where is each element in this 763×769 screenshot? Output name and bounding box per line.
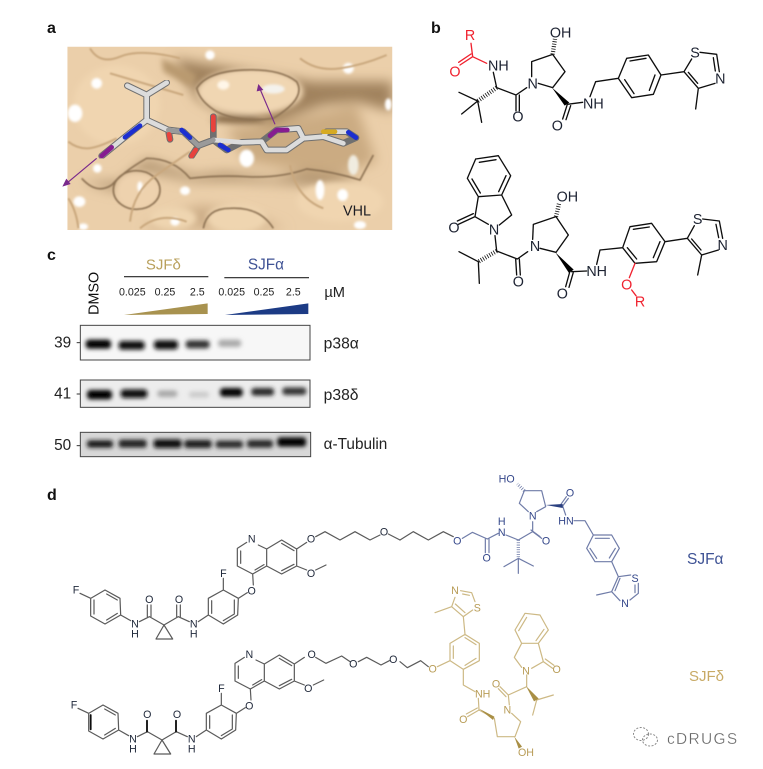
panel d: SJF alpha linker and VHL ligand (blue): O — [542, 535, 550, 547]
panel b: top VHL ligand structure: N — [527, 76, 538, 92]
panel d: SJF delta warhead (gray): O — [349, 659, 357, 671]
panel d: SJF alpha linker and VHL ligand (blue): H — [498, 516, 506, 528]
panel d: SJF delta warhead (gray): O — [143, 709, 151, 721]
panel d: SJF alpha linker and VHL ligand (blue): N — [621, 598, 629, 610]
watermark: cDRUGS: cDRUGS — [667, 731, 739, 748]
panel d: SJF alpha warhead (gray): N — [131, 618, 139, 630]
label: panel c: c — [47, 247, 56, 264]
panel b: top VHL ligand structure: NH — [488, 59, 509, 75]
header: SJF alpha: SJFα — [248, 257, 284, 274]
panel d: SJF delta linker and VHL ligand (gold): O — [553, 664, 561, 676]
blot p38 alpha: 39 — [54, 334, 71, 351]
icon: chat bubbles — [634, 728, 658, 746]
blot alpha tubulin: α-Tubulin — [324, 436, 387, 453]
concentrations: 0.025 — [119, 287, 146, 299]
panel d: SJF delta linker and VHL ligand (gold): O — [429, 664, 437, 676]
concentrations: 0.025 — [218, 287, 245, 299]
panel b: top VHL ligand structure: O — [512, 110, 524, 126]
red ether group: O — [621, 277, 632, 293]
panel d: SJF delta linker and VHL ligand (gold): NH — [475, 689, 490, 701]
panel d: SJF alpha linker and VHL ligand (blue): HN — [558, 515, 574, 527]
concentrations: 2.5 — [286, 287, 301, 299]
blot p38 alpha: p38α — [324, 336, 359, 353]
panel d: SJF delta warhead (gray): N — [188, 733, 196, 745]
panel d: SJF alpha warhead (gray): N — [190, 618, 198, 630]
red acyl group: R — [465, 28, 475, 44]
panel d: SJF delta warhead (gray) — [71, 649, 397, 755]
blot p38 delta: 41 — [54, 386, 71, 403]
panel a: VHL surface with ligand — [62, 47, 392, 233]
concentrations: 0.25 — [155, 287, 175, 299]
red ether group — [621, 263, 645, 310]
panel b: top VHL ligand structure: NH — [583, 96, 604, 112]
panel d: SJF delta warhead (gray): H — [188, 743, 196, 755]
panel d: SJF alpha warhead (gray): O — [307, 534, 315, 546]
panel d: SJF alpha warhead (gray): O — [307, 568, 315, 580]
concentrations: 2.5 — [190, 287, 205, 299]
panel d: SJF alpha linker and VHL ligand (blue): N — [529, 510, 537, 522]
panel d: SJF delta warhead (gray): O — [173, 709, 181, 721]
panel d: SJF delta linker and VHL ligand (gold): O — [459, 714, 467, 726]
header: SJF delta: SJFδ — [146, 257, 181, 274]
concentrations — [119, 287, 301, 299]
skeleton — [457, 156, 723, 287]
panel d: SJF delta warhead (gray): O — [308, 649, 316, 661]
panel d: SJF delta warhead (gray): F — [218, 683, 225, 695]
red ether group: R — [635, 294, 645, 310]
panel d: SJF delta warhead (gray): O — [245, 700, 253, 712]
panel b: bottom VHL ligand structure: O — [513, 275, 524, 291]
panel b: bottom VHL ligand structure: O — [448, 221, 460, 237]
panel b: bottom VHL ligand structure: NH — [586, 264, 607, 280]
skeleton — [459, 52, 719, 122]
label: VHL: VHL — [343, 204, 371, 220]
DMSO label: DMSO — [87, 272, 103, 315]
panel d: SJF alpha warhead (gray): O — [145, 594, 153, 606]
label: panel b: b — [431, 20, 441, 37]
panel d: SJF alpha linker and VHL ligand (blue): O — [453, 535, 461, 547]
ligand sticks — [102, 83, 356, 156]
panel d: SJF alpha warhead (gray): O — [248, 585, 256, 597]
panel b: bottom VHL ligand structure: O — [557, 286, 568, 302]
header: SJF alpha — [224, 257, 309, 278]
panel d: SJF alpha linker and VHL ligand (blue) — [400, 474, 639, 610]
panel d: SJF alpha linker and VHL ligand (blue): O — [483, 552, 491, 564]
cartoon ribbons — [68, 48, 387, 228]
panel d: SJF alpha linker and VHL ligand (blue): N — [498, 527, 506, 539]
panel b: bottom VHL ligand structure: S — [693, 212, 702, 228]
panel b: top VHL ligand structure: N — [715, 71, 726, 87]
arrows — [67, 89, 275, 183]
label: SJF delta: SJFδ — [689, 668, 724, 685]
panel d: SJF delta linker and VHL ligand (gold) — [400, 585, 561, 759]
panel d: SJF alpha warhead (gray): O — [380, 526, 388, 538]
panel d: SJF delta linker and VHL ligand (gold): N — [522, 665, 530, 677]
panel d: SJF alpha linker and VHL ligand (blue): S — [631, 573, 639, 585]
surface highlights — [68, 50, 392, 230]
panel b: bottom VHL ligand structure: OH — [557, 190, 578, 206]
gradient wedges — [124, 303, 208, 315]
panel d: SJF delta warhead (gray): O — [304, 683, 312, 695]
panel b: top VHL ligand structure: O — [552, 119, 563, 135]
unit: µM — [324, 285, 345, 301]
panel b: bottom VHL ligand structure: N — [530, 239, 540, 255]
blot alpha tubulin — [54, 432, 387, 457]
panel b: top VHL ligand structure — [449, 25, 726, 135]
panel d: SJF delta warhead (gray): H — [129, 743, 137, 755]
panel b: top VHL ligand structure: OH — [550, 25, 571, 41]
panel d: SJF alpha warhead (gray): H — [131, 628, 139, 640]
panel d: SJF delta linker and VHL ligand (gold): N — [451, 585, 459, 597]
panel d: SJF delta warhead (gray): F — [71, 700, 78, 712]
blot p38 delta — [54, 380, 359, 407]
header: SJF delta — [124, 257, 208, 277]
panel d: SJF delta linker and VHL ligand (gold): S — [474, 603, 481, 615]
label: panel d: d — [47, 487, 57, 504]
panel d: SJF alpha linker and VHL ligand (blue): O — [566, 487, 574, 499]
red acyl group: O — [449, 65, 461, 81]
blot alpha tubulin: 50 — [54, 437, 71, 454]
panel d: SJF alpha warhead (gray): F — [73, 585, 80, 597]
blot p38 alpha — [54, 325, 359, 360]
panel b: bottom VHL ligand structure: N — [489, 222, 499, 238]
protein surface — [67, 47, 392, 233]
label: panel a: a — [47, 20, 56, 37]
panel b: top VHL ligand structure: S — [690, 45, 700, 61]
watermark: cDRUGS — [634, 728, 739, 748]
panel d: SJF delta warhead (gray): N — [245, 649, 253, 661]
panel d: SJF delta linker and VHL ligand (gold): O — [492, 679, 500, 691]
panel d: SJF delta linker and VHL ligand (gold): OH — [518, 747, 534, 759]
panel c: western blot — [54, 257, 387, 457]
panel b: bottom VHL ligand structure — [448, 156, 728, 310]
blot p38 delta: p38δ — [324, 387, 359, 404]
concentrations: 0.25 — [254, 287, 274, 299]
red acyl group — [449, 28, 487, 81]
panel d: SJF alpha warhead (gray): F — [220, 568, 227, 580]
panel d: SJF delta warhead (gray): O — [389, 654, 397, 666]
panel d: SJF alpha warhead (gray): N — [248, 534, 256, 546]
panel d: SJF alpha linker and VHL ligand (blue): HO — [499, 474, 515, 486]
panel d: SJF alpha warhead (gray): H — [190, 628, 198, 640]
panel d: SJF alpha warhead (gray): O — [175, 594, 183, 606]
label: SJF alpha: SJFα — [687, 551, 724, 568]
panel d: SJF alpha warhead (gray) — [73, 526, 400, 640]
panel d: SJF delta linker and VHL ligand (gold): N — [503, 705, 511, 717]
panel d: SJF delta warhead (gray): N — [129, 733, 137, 745]
surface contours — [82, 70, 373, 228]
panel b: bottom VHL ligand structure: N — [717, 238, 728, 254]
